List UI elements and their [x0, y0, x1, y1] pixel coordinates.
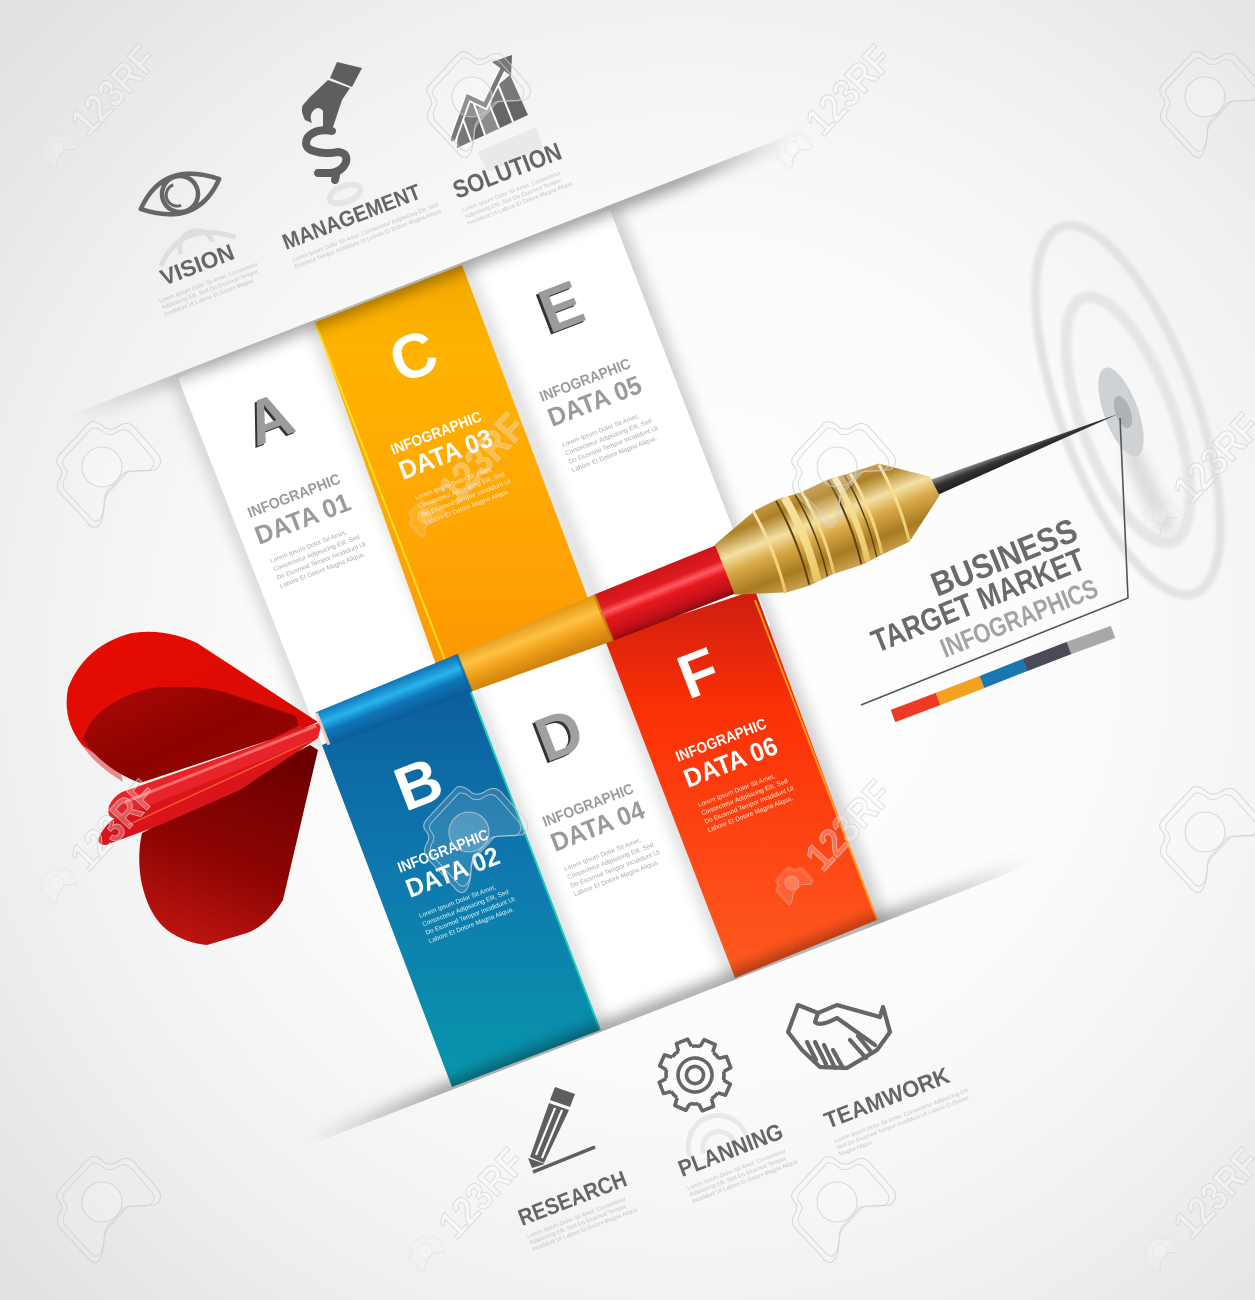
text block E: Consectetur Adipisicing Elit, Sed [564, 418, 653, 457]
column shadows [178, 215, 880, 1032]
icon: growth chart [453, 55, 543, 172]
text: teamwork description: Sed Do Eiusmod Tempor Incididunt Ut Labore Et Dolore [836, 1095, 970, 1151]
text: vision description: Lorem Ipsum Dolor Sit Amet, Consectetur [159, 262, 259, 305]
panel: top sheet [0, 0, 870, 442]
watermarks: 123RF [430, 1140, 534, 1247]
watermarks: 123RF [430, 405, 534, 512]
heading D: INFOGRAPHIC [540, 780, 636, 831]
red section [594, 545, 736, 642]
gold barrel [708, 443, 953, 612]
panel: bottom sheet [0, 790, 1255, 1300]
icon: handshake [788, 1005, 890, 1068]
text block C: Do Eiusmod Tempor Incididunt Ut [421, 478, 512, 519]
icon: hand with dollar [302, 62, 363, 207]
title: INFOGRAPHICS [936, 573, 1102, 664]
text block E: Lorem Ipsum Dolor Sit Amet, [561, 413, 640, 449]
heading D: DATA 04 [546, 794, 649, 858]
label: planning: PLANNING [674, 1118, 786, 1182]
title: BUSINESS [926, 511, 1083, 604]
letter F: F [669, 635, 729, 713]
text block E: Do Eiusmod Tempor Incididunt Ut [568, 425, 659, 466]
heading B: INFOGRAPHIC [395, 826, 491, 877]
text: planning description: Lorem Ipsum Dolor Sit Amet, Consectetur [687, 1149, 787, 1192]
heading C: INFOGRAPHIC [388, 408, 484, 459]
text: management description: Eiusmod Tempor Incididunt Ut Labore Et Dolore Magna Aliqua [294, 208, 443, 270]
dart: shaft and barrel [304, 371, 1135, 772]
text block B: Labore Et Dolore Magna Aliqua. [428, 906, 515, 945]
text block A: Lorem Ipsum Dolor Sit Amet, [269, 529, 348, 565]
text: research description: Lorem Ipsum Dolor Sit Amet, Consectetur [527, 1197, 627, 1240]
letter C: C [380, 317, 447, 397]
text block D: Lorem Ipsum Dolor Sit Amet, [563, 837, 642, 873]
watermarks: 123RF [797, 772, 901, 879]
heading F: DATA 06 [679, 730, 782, 794]
dart: stem [108, 722, 322, 818]
heading E: INFOGRAPHIC [537, 355, 633, 406]
needle [926, 407, 1121, 497]
target rings [997, 204, 1255, 616]
text block C: Lorem Ipsum Dolor Sit Amet, [414, 466, 493, 502]
text block B: Do Eiusmod Tempor Incididunt Ut [425, 896, 516, 937]
letter E: E [527, 270, 591, 349]
icon: eye [134, 161, 235, 266]
text block B: Consectetur Adipisicing Elit, Sed [421, 889, 510, 928]
text block B: Lorem Ipsum Dolor Sit Amet, [418, 884, 497, 920]
heading C: DATA 03 [394, 422, 497, 486]
panel: column C [315, 265, 600, 690]
heading A: DATA 01 [250, 487, 355, 551]
panel: column B [322, 688, 600, 1087]
label: teamwork: TEAMWORK [820, 1062, 953, 1134]
watermarks: 123RF [797, 37, 901, 144]
text block F: Lorem Ipsum Dolor Sit Amet, [697, 773, 776, 809]
panel: column F [605, 590, 877, 978]
letter B: B [385, 745, 452, 825]
title: TARGET MARKET [866, 541, 1090, 659]
text: solution description: Lorem Ipsum Dolor Sit Amet, Consectetur [462, 171, 562, 214]
dart [67, 371, 1135, 945]
coloured column shadows [315, 265, 735, 1030]
label: solution: SOLUTION [449, 138, 566, 205]
text: vision description: Adipisicing Elit, Sed Do Eiusmod Tempor [161, 269, 259, 311]
text block A: Labore Et Dolore Magna Aliqua. [279, 551, 366, 590]
text: planning description: Adipisicing Elit, Sed Do Eiusmod Tempor [689, 1156, 787, 1198]
text: teamwork description: Lorem Ipsum Dolor Sit Amet, Consectetur Adipisicing Elit [834, 1088, 969, 1145]
text: research description: Incididunt Ut Labore Et Dolore Magna Aliqua [532, 1207, 639, 1253]
text: vision description: Incididunt Ut Labore Et Dolore Magna [164, 278, 255, 318]
text: solution description: Adipisicing Elit, Sed Do Eiusmod Tempor [464, 178, 562, 220]
text block C: Labore Et Dolore Magna Aliqua. [424, 488, 511, 527]
text: teamwork description: Magna Aliqua [839, 1140, 874, 1158]
text block F: Do Eiusmod Tempor Incididunt Ut [704, 785, 795, 826]
text block F: Consectetur Adipisicing Elit, Sed [700, 778, 789, 817]
target market title block [861, 418, 1128, 716]
text block D: Labore Et Dolore Magna Aliqua. [573, 859, 660, 898]
text block F: Labore Et Dolore Magna Aliqua. [707, 795, 794, 834]
letter A: A [234, 381, 301, 462]
heading A: INFOGRAPHIC [245, 471, 343, 522]
text: management description: Lorem Ipsum Dolor Sit Amet, Consectetur Adipisicing Elit, Sed [292, 202, 440, 264]
text block D: Consectetur Adipisicing Elit, Sed [566, 842, 655, 881]
panel: column E [462, 210, 770, 690]
letter E: E [530, 268, 593, 347]
dart: upper flight [67, 632, 318, 783]
dart: lower flight [139, 745, 318, 945]
text block E: Labore Et Dolore Magna Aliqua. [571, 435, 658, 474]
text: planning description: Incididunt Ut Labore Et Dolore Magna Aliqua [692, 1159, 799, 1205]
panel: column A [178, 322, 450, 745]
colour bar [893, 632, 1113, 716]
text: research description: Adipisicing Elit, Sed Do Eiusmod Tempor [529, 1204, 627, 1246]
yellow section [455, 594, 613, 696]
heading B: DATA 02 [401, 840, 504, 904]
text block D: Do Eiusmod Tempor Incididunt Ut [570, 849, 661, 890]
label: vision: VISION [156, 239, 238, 291]
watermarks: 123RF [62, 772, 166, 879]
watermarks: 123RF [62, 37, 166, 144]
icon: gear [648, 1028, 747, 1158]
heading F: INFOGRAPHIC [673, 715, 769, 766]
text block A: Consectetur Adipisicing Elit, Sed [272, 534, 361, 573]
text block A: Do Eiusmod Tempor Incididunt Ut [276, 541, 367, 582]
letter D: D [524, 697, 590, 778]
heading E: DATA 05 [543, 369, 646, 433]
icon: pencil [528, 1087, 595, 1172]
text block C: Consectetur Adipisicing Elit, Sed [417, 471, 506, 510]
label: management: MANAGEMENT [279, 179, 425, 255]
letter A: A [236, 379, 303, 460]
sheet shadows [70, 135, 1030, 1145]
dart: centre fin [98, 725, 318, 845]
blue section [315, 654, 472, 748]
connector line [861, 418, 1128, 705]
panel: column D [470, 640, 735, 1032]
text: solution description: Incididunt Ut Labore Et Dolore Magna Aliqua [467, 181, 574, 227]
label: research: RESEARCH [514, 1166, 630, 1231]
letter D: D [526, 695, 593, 776]
